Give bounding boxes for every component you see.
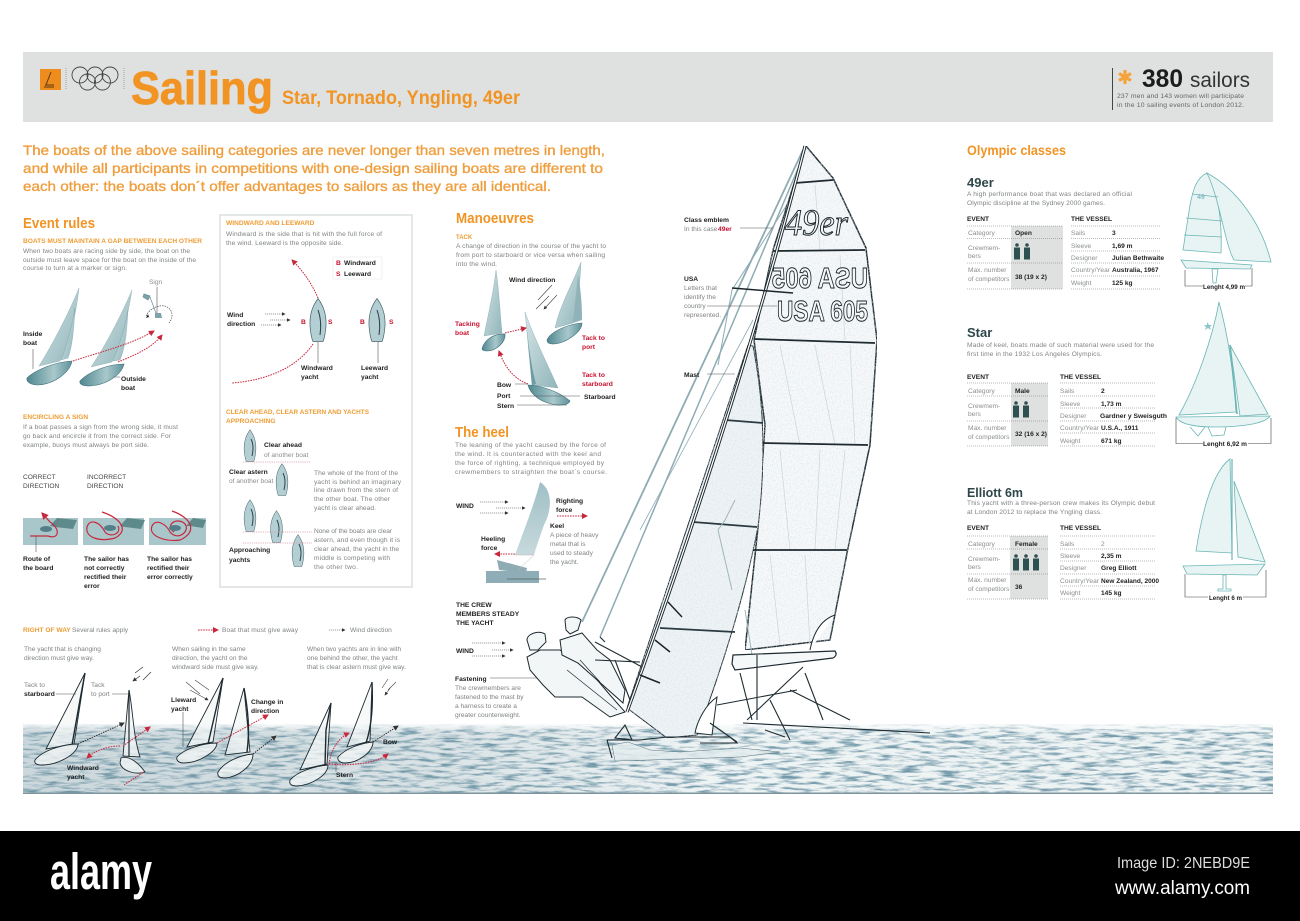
diagram: clear ahead and astern yachts: Clear ahead [264,442,302,449]
table: the vessel: Greg Elliott [1101,565,1137,572]
table: the vessel [1071,216,1164,289]
diagram: windward and leeward yachts: direction [227,321,255,328]
text: right of way rules [24,646,406,671]
table: the vessel: Country/Year [1071,267,1111,274]
diagram: heel: force [556,507,573,514]
diagram: heel [456,482,599,583]
text: tack: from port to starboard or vice versa when sailing [456,252,605,259]
table: the vessel: Weight [1060,590,1081,597]
diagram: same direction yachts: direction [251,708,279,715]
table: the vessel: THE VESSEL [1060,374,1101,381]
text: right of way rules: When two yachts are in line with [307,646,402,653]
table: event: Open [1015,230,1032,237]
table: the vessel: 1,69 m [1112,243,1133,250]
text: fastening: Fastening [455,676,487,683]
text: maintain a gap: outside must leave space for the boat on the inside of the [23,257,196,264]
diagram: same direction yachts: yacht [171,706,189,713]
captions: route diagrams: rectified their [147,565,190,572]
drawing: 49er boat: Lenght 4,99 m [1203,284,1245,291]
labels: main illustration: USA [684,276,698,283]
boom deck [732,651,836,670]
text: fastening [455,676,553,719]
table: the vessel: Country/Year [1060,425,1100,432]
diagram: tack: starboard [582,381,613,388]
diagram: tack [455,262,616,410]
table: the vessel: 145 kg [1101,590,1122,597]
table: the vessel: Weight [1060,438,1081,445]
table: event: 36 [1015,584,1023,591]
text: maintain a gap: course to turn at a marker or sign. [23,265,127,272]
drawing: star boat: Lenght 6,92 m [1203,441,1247,448]
text: clear ahead explanation [314,470,402,512]
intro text: and while all participants in competitions with one-design sailing boats are different to [23,160,603,176]
text: maintain a gap: BOATS MUST MAINTAIN A GAP BETWEEN EACH OTHER [23,238,202,245]
main illustration: 49er yacht [527,146,930,761]
text: crew members steady the yacht: MEMBERS STEADY [456,611,520,618]
diagram: heel: Heeling [481,536,505,543]
captions: route diagrams [23,556,193,590]
stat: 380 sailors: 237 men and 143 women will participate [1117,93,1244,100]
spreaders [640,288,793,683]
table: event: EVENT [967,216,989,223]
table: the vessel: Weight [1071,280,1092,287]
table: event: Category [968,541,995,548]
panel: 49er: Olympic discipline at the Sydney 2000 games. [967,200,1105,207]
stat: 380 sailors: in the 10 sailing events of London 2012. [1117,102,1244,109]
labels: main illustration: Mast [684,372,700,379]
diagram: changing direction yachts: yacht [67,774,85,781]
table: the vessel: Gardner y Sweisguth [1100,413,1167,420]
heading: manoeuvres: Manoeuvres [456,210,534,227]
captions: route diagrams: not correctly [84,565,125,572]
diagram: inside and outside boats at a sign: Inside [23,331,43,338]
diagram: heel: the yacht. [550,559,579,566]
intro text: each other: the boats don´t offer advantages to sailors as they are all identical. [23,178,551,194]
table: the vessel: 2 [1101,541,1105,548]
text: windward and leeward: WINDWARD AND LEEWARD [226,220,315,227]
diagram: heel: Keel [550,523,564,530]
table: event: Max. number [968,425,1007,432]
table: event: 32 (16 x 2) [1015,431,1047,438]
table: event: Max. number [968,577,1007,584]
panel: 49er: 49er [967,175,994,190]
text: the heel: the force of righting, a technique employed by [455,460,605,467]
text: fastening: a harness to create a [455,703,517,710]
diagram: tack: Tack to [582,335,605,342]
crew [527,617,625,717]
labels: main illustration: represented. [684,312,721,319]
drawing: elliott boat: Lenght 6 m [1209,595,1242,602]
mirrored sail number: USA 605 [772,263,868,295]
heading: event rules: Event rules [23,215,95,232]
diagram: tack: Port [497,393,511,400]
diagram: windward and leeward yachts: S [328,319,333,326]
table: the vessel: 2,35 m [1101,553,1122,560]
text: encircling a sign: INCORRECT [87,474,126,481]
labels: main illustration: In this case [684,226,718,233]
text: tack: TACK [456,235,473,241]
text: fastening: fastened to the mast by [455,694,524,701]
footer bar [0,831,1300,921]
right of way legend: Several rules apply [72,627,129,634]
legend: B and S: S [336,271,341,278]
table: event [967,374,1048,446]
text: approaching explanation [314,528,401,571]
text: fastening: The crewmembers are [455,685,521,692]
shrouds [582,150,805,637]
text: clear ahead explanation: yacht is behind an imaginary [314,479,402,486]
captions: route diagrams: Route of [23,556,51,563]
diagram: incorrect route [83,512,145,545]
drawing: 49er boat: 49 [1197,194,1205,201]
text: windward and leeward: Windward is the side that is hit with the full force of [226,231,382,238]
table: the vessel: Sleeve [1060,553,1080,560]
table: event: Crewmem- [968,403,1000,410]
diagram: tack: Tack to [582,372,605,379]
table: the vessel: Julian Bethwaite [1112,255,1164,262]
table: event: Crewmem- [968,245,1000,252]
jib battens [660,420,763,632]
captions: route diagrams: The sailor has [147,556,192,563]
text: clear ahead explanation: line drawn from the stern of [314,487,398,494]
labels: main illustration: country [684,303,706,310]
text: crew members steady the yacht [456,602,520,656]
drawing: elliott boat [1183,459,1266,602]
diagram: clear ahead and astern yachts: of another boat [229,478,274,485]
panel: elliott 6m: Elliott 6m [967,485,1023,500]
diagram: changing direction yachts: Tack [91,682,105,689]
text: the heel [455,442,607,476]
table: event: Category [968,388,995,395]
text: approaching explanation: middle is competing with [314,555,390,562]
panel: star [967,302,1271,448]
table: the vessel: Designer [1071,255,1098,262]
text: right of way rules: When sailing in the same [172,646,246,653]
diagram: changing direction yachts: to port [91,691,110,698]
text: right of way rules: that is clear astern must give way. [307,664,406,671]
text: the heel: the wind. It is counteracted with the keel and [455,451,601,458]
table: event: Male [1015,388,1030,395]
table: event: Category [968,230,995,237]
diagram: tack: port [582,344,596,351]
diagram: same direction yachts: Lleward [171,697,196,704]
text: tack: A change of direction in the course of the yacht to [456,243,606,250]
text: maintain a gap [23,238,202,272]
table: event: Crewmem- [968,556,1000,563]
diagram: clear ahead and astern yachts: Clear astern [229,469,268,476]
legend: B and S [333,257,382,279]
drawing: 49er boat [1181,173,1271,291]
leech curve [810,615,835,650]
table: the vessel: Designer [1060,413,1087,420]
diagram: changing direction yachts: Tack to [24,682,45,689]
icon: sailing pictogram [40,69,61,90]
diagram: clear ahead and astern yachts [229,430,312,567]
captions: route diagrams: The sailor has [84,556,129,563]
table: event: bers [968,411,982,418]
panel: 49er: A high performance boat that was declared an official [967,191,1133,198]
diagram: windward and leeward yachts: S [389,319,394,326]
table: event: Max. number [968,267,1007,274]
diagram: same direction yachts [171,678,283,778]
title: Sailing [131,62,273,114]
legend: B and S: Windward [344,260,376,267]
stat: 380 sailors: 380 [1142,65,1183,93]
text: right of way rules: one behind the other, the yacht [307,655,398,662]
table: the vessel: 1,73 m [1101,401,1122,408]
table: event [967,525,1048,599]
text: encircling a sign: If a boat passes a sign from the wrong side, it must [23,424,178,431]
diagram: rectified route [149,511,206,545]
diagram: yachts in line: Stern [336,772,353,779]
text: windward and leeward: the wind. Leeward is the opposite side. [226,240,343,247]
right of way legend: Boat that must give away [222,627,299,634]
table: the vessel: 125 kg [1112,280,1133,287]
diagram: inside and outside boats at a sign: Sign [149,279,163,286]
legend: B and S: Leeward [344,271,371,278]
diagram: windward and leeward yachts: B [301,319,306,326]
diagram: inside and outside boats at a sign: boat [23,340,38,347]
text: the heel: crewmembers to straighten the boat´s course. [455,469,607,476]
text: right of way rules: windward side must give way. [171,664,259,671]
intro text: The boats of the above sailing categories are never longer than seven metres in length, [23,142,605,158]
stat: 380 sailors [1112,65,1250,110]
table: event: EVENT [967,525,989,532]
diagram: windward and leeward yachts: yacht [361,374,379,381]
table: the vessel: Sails [1060,388,1075,395]
text: fastening: greater counterweight. [455,712,521,719]
diagram: heel: WIND [456,503,474,510]
mainsail [745,146,877,650]
panel: star: Made of keel, boats made of such material were used for the [967,342,1154,349]
sail seams [770,185,855,645]
table: the vessel: Sleeve [1060,401,1080,408]
text: clear ahead heading [226,409,370,425]
labels: main illustration: Letters that [684,285,717,292]
heading: olympic classes: Olympic classes [967,142,1066,158]
panel: star: Star [967,325,992,340]
sail number: USA 605 [777,296,868,328]
text: windward and leeward [226,220,382,247]
diagram: heel: A piece of heavy [550,532,599,539]
captions: route diagrams: rectified their [84,574,127,581]
class emblem: 49er [785,203,849,244]
footer url: www.alamy.com [1114,878,1250,899]
panel: elliott 6m: This yacht with a three-person crew makes its Olympic debut [967,500,1155,507]
legend: B and S: B [336,260,341,267]
diagram: clear ahead and astern yachts: of another boat [264,452,309,459]
diagram: tack: Tacking [455,321,480,328]
diagram: clear ahead and astern yachts: yachts [229,557,250,564]
text: clear ahead explanation: The whole of the front of the [314,470,398,477]
diagram: changing direction yachts: starboard [24,691,55,698]
rig frame [595,637,930,758]
table: event: 38 (19 x 2) [1015,274,1047,281]
intro text [23,142,605,194]
diagram: windward and leeward yachts: Windward [301,365,333,372]
table: the vessel: U.S.A., 1911 [1101,425,1139,432]
diagram: clear ahead and astern yachts: Approaching [229,547,270,554]
diagram: heel: force [481,545,498,552]
diagram: inside and outside boats at a sign: boat [121,385,136,392]
text: clear ahead explanation: the other boat. The other [314,496,391,503]
labels: main illustration: identify the [684,294,716,301]
panel: 49er [967,173,1271,291]
captions: route diagrams: error correctly [147,574,193,581]
diagram: tack: boat [455,330,470,337]
bow wash [612,742,780,761]
text: clear ahead heading: APPROACHING [226,418,275,425]
text: tack [456,235,606,268]
diagram: inside and outside boats at a sign [23,279,172,392]
text: right of way rules: direction must give way. [24,655,94,662]
diagram: windward and leeward yachts: B [360,319,365,326]
panel: elliott 6m: at London 2012 to replace the Yngling class. [967,509,1102,516]
jib [627,345,763,738]
right of way legend [23,627,392,634]
text: clear ahead heading: CLEAR AHEAD, CLEAR ASTERN AND YACHTS [226,409,370,416]
diagram: heel: used to steady [550,550,594,557]
table: event: Female [1015,541,1038,548]
panel: elliott 6m [967,459,1266,602]
text: encircling a sign [23,414,178,490]
diagram: correct route [23,513,78,552]
diagram: tack: Wind direction [509,277,555,284]
table: event: bers [968,253,982,260]
table: the vessel: Australia, 1967 [1112,267,1159,274]
diagram: windward and leeward yachts: Wind [227,312,243,319]
text: encircling a sign: CORRECT [23,474,56,481]
table: event: of competitors [968,586,1010,593]
right of way legend: Wind direction [350,627,392,634]
diagram: heel: metal that is [550,541,586,548]
labels: main illustration: Class emblem [684,217,729,224]
panel: star: first time in the 1932 Los Angeles Olympics. [967,351,1102,358]
diagram: windward and leeward yachts: yacht [301,374,319,381]
captions: route diagrams: error [84,583,100,590]
diagram: changing direction yachts: Windward [67,765,99,772]
text: crew members steady the yacht: THE CREW [456,602,492,609]
labels: main illustration: 49er [718,226,732,233]
text: approaching explanation: None of the boats are clear [314,528,393,535]
table: the vessel: 671 kg [1101,438,1122,445]
table: event: EVENT [967,374,989,381]
header band [23,52,1273,122]
diagram: yachts in line [290,679,398,786]
footer logo: alamy [50,843,152,900]
table: the vessel: Sleeve [1071,243,1091,250]
mast [627,146,805,712]
table: the vessel: THE VESSEL [1060,525,1101,532]
table: event: bers [968,564,982,571]
diagram: tack: Bow [497,382,512,389]
text: approaching explanation: clear ahead, the yacht in the [314,546,399,553]
table: the vessel: 2 [1101,388,1105,395]
text: crew members steady the yacht: THE YACHT [456,620,494,627]
table: the vessel: Designer [1060,565,1087,572]
text: tack: into the wind. [456,261,497,268]
table: event: of competitors [968,276,1010,283]
right of way legend: RIGHT OF WAY [23,627,71,634]
captions: route diagrams: the board [23,565,53,572]
text: encircling a sign: ENCIRCLING A SIGN [23,414,88,421]
table: event [967,216,1063,289]
table: the vessel: New Zealand, 2000 [1101,578,1159,585]
text: maintain a gap: When two boats are racing side by side, the boat on the [23,248,190,255]
sea band [23,723,1273,794]
diagram: tack: Starboard [584,394,616,401]
text: encircling a sign: DIRECTION [87,483,124,490]
stat: 380 sailors: sailors [1190,69,1250,92]
text: encircling a sign: DIRECTION [23,483,60,490]
heading: the heel: The heel [455,424,509,441]
diagram: heel: Righting [556,498,583,505]
table: the vessel: Sails [1060,541,1075,548]
diagram: inside and outside boats at a sign: Outside [121,376,146,383]
diagram: windward and leeward yachts [227,260,394,383]
table: the vessel: Sails [1071,230,1086,237]
icon: olympic rings [72,67,118,90]
table: event: of competitors [968,434,1010,441]
text: right of way rules: The yacht that is changing [24,646,101,653]
text: encircling a sign: go back and encircle it from the correct side. For [23,433,172,440]
labels: main illustration [684,217,777,379]
battens [753,180,875,550]
subtitle: Star, Tornado, Yngling, 49er [282,88,521,109]
diagram: yachts in line: Bow [383,739,398,746]
drawing: star boat [1176,302,1271,448]
table: the vessel: Country/Year [1060,578,1100,585]
text: crew members steady the yacht: WIND [456,648,474,655]
text: approaching explanation: the other two. [314,564,358,571]
text: approaching explanation: astern, and even though it is [314,537,401,544]
table: the vessel [1060,374,1167,446]
diagram: same direction yachts: Change in [251,699,283,706]
diagram: windward and leeward yachts: Leeward [361,365,388,372]
text: encircling a sign: example, buoys must always be port side. [23,442,149,449]
footer image id: Image ID: 2NEBD9E [1117,855,1250,872]
table: the vessel: THE VESSEL [1071,216,1112,223]
table: the vessel: 3 [1112,230,1116,237]
text: clear ahead explanation: yacht is clear ahead. [314,505,376,512]
text: the heel: The leaning of the yacht caused by the force of [455,442,606,449]
diagram: tack: Stern [497,403,514,410]
panel: windward and leeward [220,215,412,587]
text: right of way rules: direction, the yacht on the [172,655,248,662]
diagram: changing direction yachts [24,667,151,785]
table: the vessel [1060,525,1159,599]
